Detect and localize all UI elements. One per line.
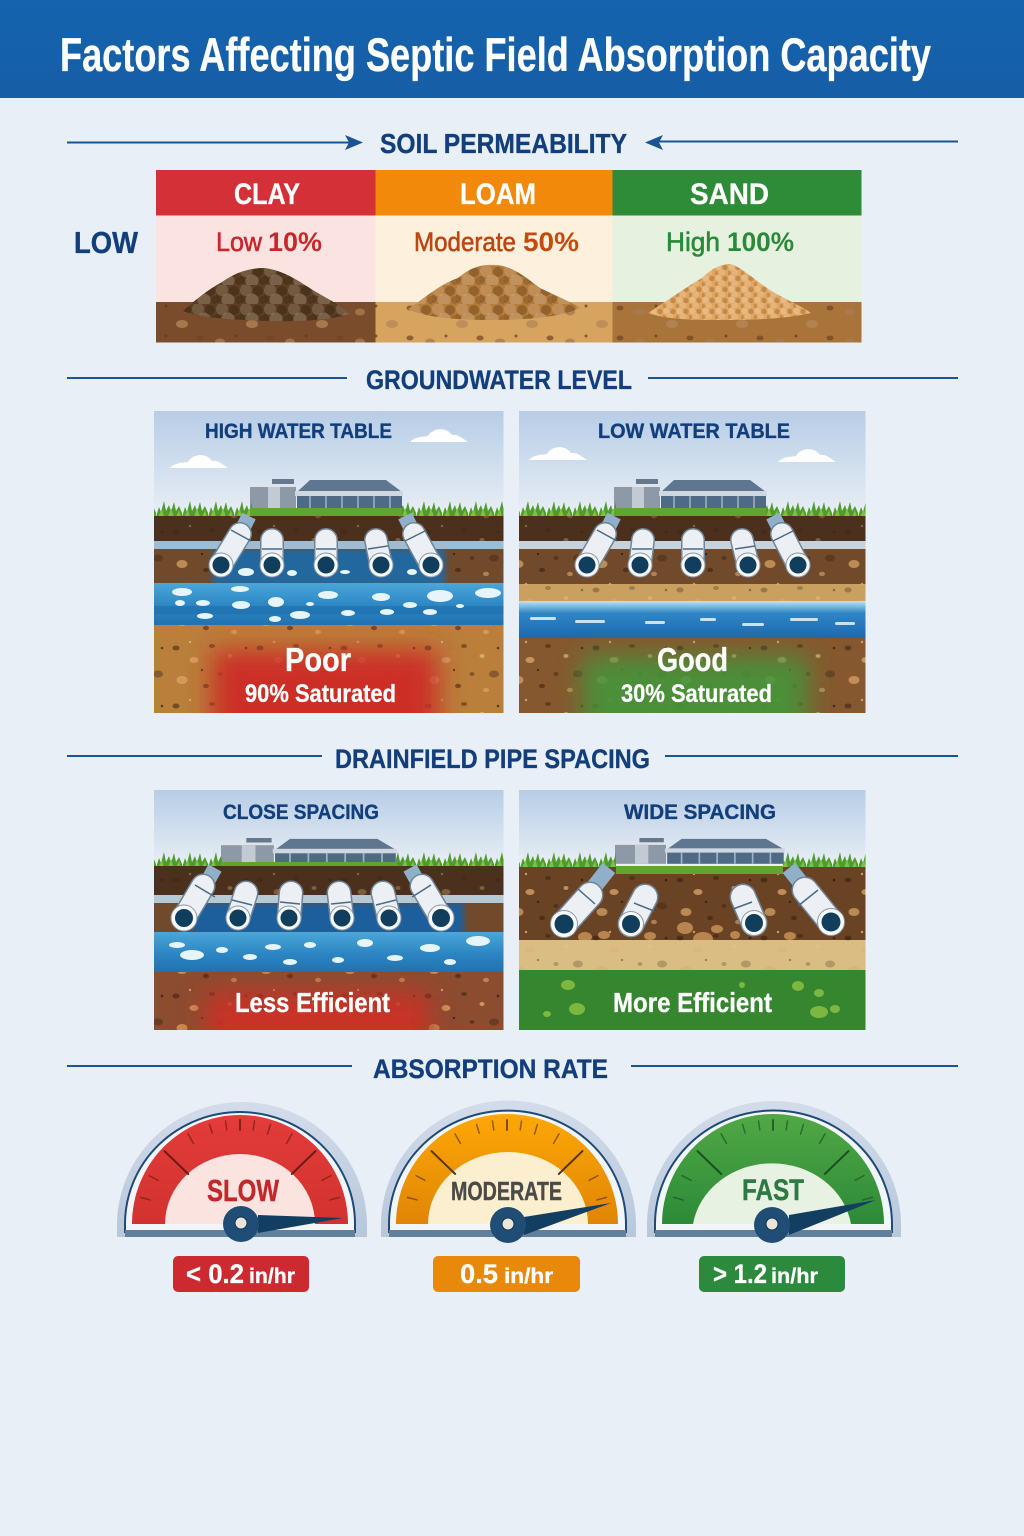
gauge: fast: FAST xyxy=(742,1174,804,1207)
gauge: slow: in/hr xyxy=(249,1265,295,1288)
large stones xyxy=(578,922,796,946)
needle xyxy=(258,1215,343,1233)
axis label: low: LOW xyxy=(74,225,139,260)
gauge: slow: < 0.2 xyxy=(186,1259,244,1289)
foam in water xyxy=(172,568,501,622)
hub xyxy=(223,1206,259,1242)
horizontal manifold pipe xyxy=(154,895,504,903)
column: loam: LOAM xyxy=(460,178,536,211)
panel: soil permeability table xyxy=(156,170,862,342)
gauge: moderate: MODERATE xyxy=(451,1176,562,1206)
drain pipes xyxy=(171,868,454,931)
column: sand: 100% xyxy=(727,227,794,257)
column: clay: 10% xyxy=(268,227,322,257)
drain pipes xyxy=(575,516,810,577)
gauge: fast xyxy=(647,1101,901,1292)
panel: high water table xyxy=(154,411,504,713)
green pebbles xyxy=(543,980,840,1018)
panel: low water table xyxy=(519,411,866,713)
panel: low water table: Good xyxy=(657,641,728,678)
panel: close spacing: CLOSE SPACING xyxy=(223,801,379,824)
panel: high water table: 90% Saturated xyxy=(245,680,396,708)
panel: wide spacing xyxy=(519,790,866,1030)
heading: soil permeability: SOIL PERMEABILITY xyxy=(380,128,627,159)
gauge: slow: SLOW xyxy=(207,1173,280,1208)
heading: drainfield pipe spacing: DRAINFIELD PIPE SPACING xyxy=(335,744,650,774)
waves in water table xyxy=(530,617,855,626)
panel: wide spacing: More Efficient xyxy=(613,987,772,1018)
horizontal manifold pipe xyxy=(519,541,866,549)
column: loam xyxy=(376,170,612,342)
gauge: moderate: 0.5 xyxy=(460,1259,498,1289)
column: sand: SAND xyxy=(690,178,769,211)
column: sand xyxy=(612,170,862,342)
needle xyxy=(524,1203,611,1235)
value pill xyxy=(173,1256,309,1292)
drain pipes xyxy=(550,868,844,938)
column: sand: High xyxy=(666,227,720,257)
heading: groundwater level: GROUNDWATER LEVEL xyxy=(366,365,632,395)
drain pipes xyxy=(209,516,443,577)
value pill xyxy=(433,1256,580,1292)
title banner xyxy=(0,0,1024,98)
column: clay xyxy=(156,170,376,342)
heading: soil permeability xyxy=(67,128,958,159)
gauge: fast: in/hr xyxy=(771,1265,818,1288)
panel: low water table: 30% Saturated xyxy=(621,680,772,708)
value pill xyxy=(699,1256,845,1292)
panel: high water table: Poor xyxy=(285,641,351,678)
column: loam: 50% xyxy=(523,227,579,257)
needle xyxy=(789,1200,876,1235)
column: clay: Low xyxy=(216,227,262,257)
panel: low water table: LOW WATER TABLE xyxy=(598,420,790,443)
panel: wide spacing: WIDE SPACING xyxy=(624,801,776,824)
horizontal manifold pipe xyxy=(154,541,504,549)
gauge: fast: > 1.2 xyxy=(713,1259,767,1289)
hub xyxy=(754,1207,790,1243)
gauge: moderate: in/hr xyxy=(504,1265,553,1288)
gauge: moderate xyxy=(381,1101,636,1292)
column: loam: Moderate xyxy=(414,227,516,257)
column: clay: CLAY xyxy=(234,178,300,211)
gauge: slow xyxy=(117,1102,367,1292)
heading: absorption rate: ABSORPTION RATE xyxy=(373,1054,608,1084)
panel: close spacing: Less Efficient xyxy=(235,987,390,1018)
hub xyxy=(490,1207,526,1243)
panel: close spacing xyxy=(154,790,504,1030)
panel: high water table: HIGH WATER TABLE xyxy=(205,420,392,443)
foam in water xyxy=(169,936,490,965)
